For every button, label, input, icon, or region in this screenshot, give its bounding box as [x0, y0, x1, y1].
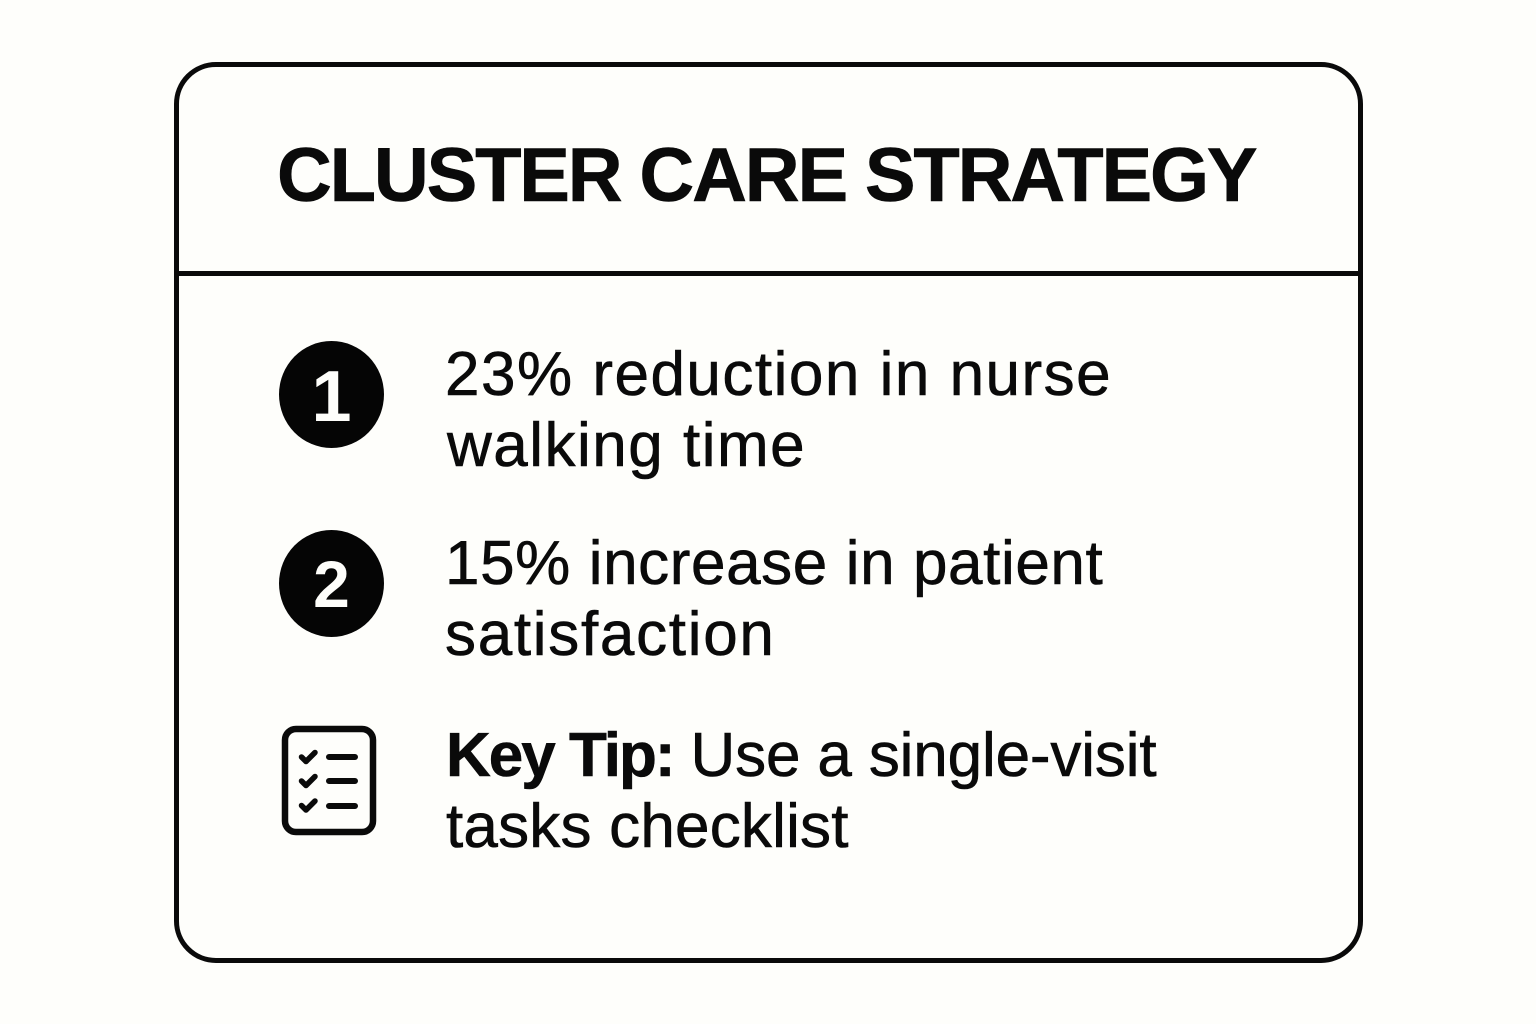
icon: number 1: [279, 341, 384, 448]
text: patient satisfaction: satisfaction: [445, 600, 776, 669]
title: CLUSTER CARE STRATEGY: [277, 133, 1255, 218]
text: key tip: tasks checklist: [446, 792, 849, 861]
icon: checklist: [282, 726, 376, 836]
icon: number 1: 1: [311, 357, 352, 437]
text: patient satisfaction: [445, 529, 1103, 669]
text: key tip: [446, 721, 1156, 861]
text: key tip: Key Tip: Use a single-visit: [446, 721, 1156, 790]
text: nurse walking time: walking time: [447, 411, 806, 480]
text: patient satisfaction: 15% increase in patient: [445, 529, 1103, 598]
heading divider: [176, 271, 1360, 276]
icon: number 2: [279, 530, 384, 637]
text: nurse walking time: [445, 340, 1112, 480]
icon: number 2: 2: [313, 547, 350, 621]
panel: cluster care card: [174, 62, 1363, 963]
text: nurse walking time: 23% reduction in nurse: [445, 340, 1112, 409]
